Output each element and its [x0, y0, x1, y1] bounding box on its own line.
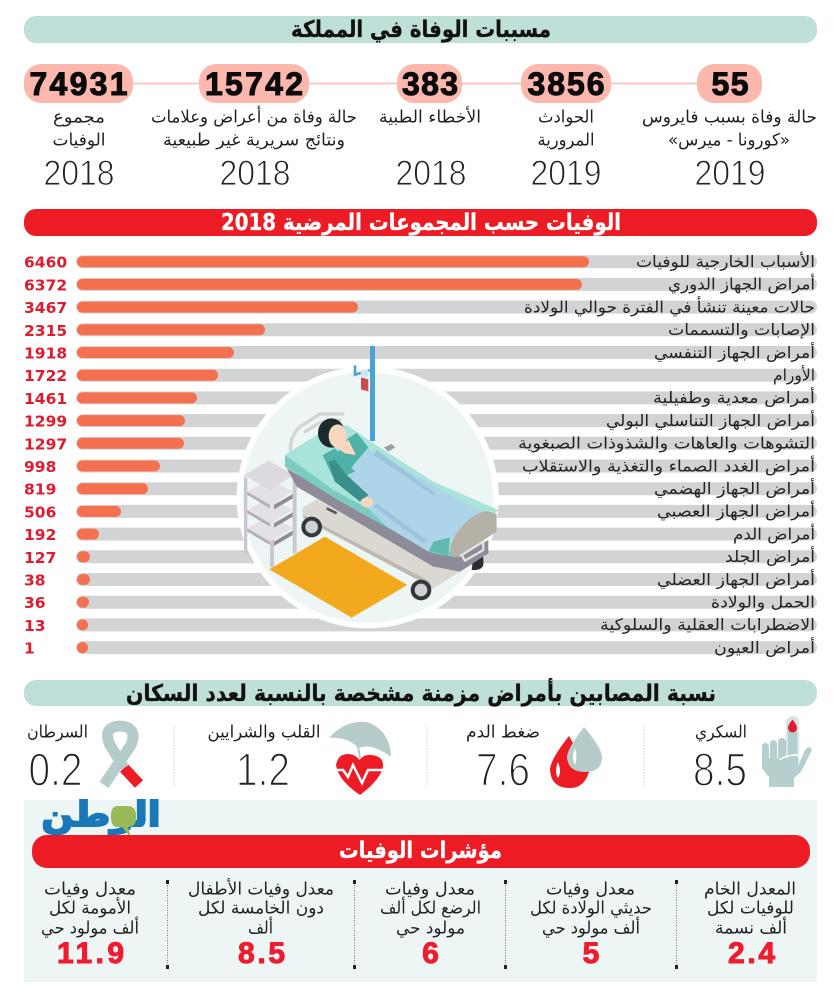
indicator: diabetes	[693, 716, 812, 796]
stat: corona MERS 55	[642, 64, 817, 193]
bar chart: deaths by disease group: الأسباب الخارجية للوفيات	[636, 251, 815, 272]
indicator: heart and arteries: القلب والشرايين	[208, 722, 320, 742]
headrail	[291, 414, 343, 452]
bar chart: deaths by disease group: 506	[24, 503, 56, 521]
bar chart: deaths by disease group: 13	[24, 617, 46, 635]
bar chart: deaths by disease group: 6372	[24, 276, 67, 294]
stat: total deaths 74931: 74931	[30, 66, 128, 102]
bar chart: deaths by disease group: أمراض الجلد	[725, 546, 815, 567]
indicator: blood pressure: 7.6	[476, 744, 530, 796]
icon: hand with blood drop	[762, 716, 812, 787]
bar chart: deaths by disease group: 36	[24, 594, 46, 612]
indicator: crude death rate: 2.4	[728, 937, 775, 970]
bar chart: deaths by disease group: 1918	[24, 344, 67, 362]
bar chart: deaths by disease group: أمراض العيون	[714, 637, 815, 658]
stat: medical errors 383: الأخطاء الطبية	[379, 106, 481, 128]
indicator: infant mortality: الرضع لكل ألف	[380, 896, 481, 918]
mattress	[285, 425, 498, 557]
bar chart: deaths by disease group: أمراض الغدد الصماء والتغذية والاستقلاب	[522, 455, 815, 476]
stat: total deaths 74931: مجموع	[53, 108, 105, 128]
indicator: crude death rate: للوفيات لكل	[707, 898, 794, 918]
indicator: blood pressure: ضغط الدم	[466, 722, 540, 742]
bar chart: deaths by disease group: الأورام	[773, 364, 815, 386]
indicator: under five mortality	[188, 878, 334, 970]
indicator: cancer	[27, 722, 139, 796]
heading: deaths by disease groups 2018	[24, 209, 817, 236]
indicator: diabetes: 8.5	[693, 744, 747, 796]
indicator: neonatal mortality	[530, 880, 652, 970]
indicator: neonatal mortality: معدل وفيات	[546, 880, 635, 900]
patient	[318, 418, 373, 507]
indicator: maternal mortality: ألف مولود حي	[41, 916, 139, 938]
stat: road accidents 3856: 2019	[530, 154, 602, 193]
indicator: cancer: السرطان	[27, 722, 88, 742]
stat: medical errors 383: 2018	[396, 154, 466, 193]
bar chart: deaths by disease group: 6460	[24, 254, 67, 272]
heading: mortality indicators	[32, 835, 810, 868]
rug	[269, 537, 407, 618]
indicator: blood pressure	[466, 722, 602, 796]
bed frame	[287, 468, 488, 572]
stat: corona MERS 55: حالة وفاة بسبب فايروس	[642, 108, 817, 128]
indicator: neonatal mortality: حديثي الولادة لكل	[530, 898, 652, 918]
bar chart: deaths by disease group: أمراض الجهاز العضلي	[657, 569, 815, 590]
heading: mortality indicators: مؤشرات الوفيات	[339, 838, 502, 864]
heading: deaths by disease groups 2018: الوفيات حسب المجموعات المرضية 2018	[221, 210, 621, 236]
stat: corona MERS 55: 55	[712, 66, 748, 102]
bar chart: deaths by disease group: 1297	[24, 435, 67, 453]
stat: medical errors 383: 383	[402, 66, 458, 102]
bar chart: deaths by disease group: الحمل والولادة	[711, 592, 815, 612]
stat: total deaths 74931: الوفيات	[52, 130, 106, 150]
bed base and wheels	[301, 499, 483, 600]
heading: causes of death in the kingdom	[24, 16, 817, 43]
bar chart: deaths by disease group: أمراض معدية وطفيلية	[653, 387, 815, 408]
indicator: heart and arteries: 1.2	[236, 744, 290, 796]
bar chart: deaths by disease group: الاضطرابات العقلية والسلوكية	[600, 615, 815, 635]
indicator: under five mortality: معدل وفيات الأطفال	[188, 878, 334, 900]
indicator: neonatal mortality: 5	[583, 937, 599, 970]
illustration: patient on hospital bed	[237, 346, 499, 628]
stat: abnormal symptoms 15742	[151, 64, 357, 193]
indicator: crude death rate: المعدل الخام	[704, 880, 796, 900]
indicator: under five mortality: ألف	[248, 916, 273, 938]
indicator: crude death rate: ألف نسمة	[715, 916, 787, 938]
bar chart: deaths by disease group	[24, 251, 817, 658]
bar chart: deaths by disease group: 127	[24, 549, 56, 567]
indicator: neonatal mortality: ألف مولود حي	[542, 916, 640, 938]
indicator: crude death rate	[704, 880, 796, 970]
logo: Al Watan: الوطن	[42, 795, 160, 835]
heading: causes of death in the kingdom: مسببات الوفاة في المملكة	[291, 17, 551, 43]
icon: awareness ribbon	[104, 726, 139, 785]
IV pole	[355, 346, 375, 441]
panel: death cause totals	[24, 64, 817, 193]
stat: road accidents 3856: الحوادث	[538, 108, 594, 128]
indicator: cancer: 0.2	[28, 744, 82, 796]
indicator: maternal mortality: الأمومة لكل	[49, 898, 131, 918]
indicator: maternal mortality: معدل وفيات	[44, 880, 136, 900]
bar chart: deaths by disease group: أمراض الجهاز العصبي	[657, 501, 815, 522]
stat: abnormal symptoms 15742: ونتائج سريرية غير طبيعية	[163, 130, 345, 150]
stat: corona MERS 55: «كورونا - ميرس»	[668, 130, 790, 150]
bar chart: deaths by disease group: 1299	[24, 413, 67, 431]
stat: abnormal symptoms 15742: 15742	[205, 66, 303, 102]
bar chart: deaths by disease group: 2315	[24, 322, 67, 340]
bar chart: deaths by disease group: 819	[24, 481, 56, 499]
stat: total deaths 74931	[24, 64, 133, 193]
bar chart: deaths by disease group: 3467	[24, 299, 67, 317]
bar chart: deaths by disease group: أمراض الجهاز الدوري	[668, 274, 815, 295]
bar chart: deaths by disease group: 192	[24, 526, 56, 544]
bar chart: deaths by disease group: 1722	[24, 367, 67, 385]
indicator: under five mortality: 8.5	[238, 937, 285, 970]
icon: blood drops	[550, 727, 602, 788]
bar chart: deaths by disease group: 38	[24, 572, 46, 590]
bar chart: deaths by disease group: أمراض الجهاز التناسلي البولي	[606, 410, 815, 431]
indicator: maternal mortality: 11.9	[57, 937, 124, 970]
stat: road accidents 3856: 3856	[528, 66, 604, 102]
bar chart: deaths by disease group: أمراض الدم	[733, 523, 815, 544]
bar chart: deaths by disease group: 1461	[24, 390, 67, 408]
indicator: infant mortality: مولود حي	[396, 918, 465, 938]
icon: umbrella over heart	[329, 722, 391, 795]
bar chart: deaths by disease group: الإصابات والتسممات	[668, 320, 815, 340]
indicator: infant mortality	[380, 880, 481, 970]
bar chart: deaths by disease group: 998	[24, 458, 56, 476]
stat: abnormal symptoms 15742: 2018	[220, 154, 290, 193]
indicator: infant mortality: 6	[422, 937, 439, 970]
panel: mortality indicators	[24, 795, 817, 982]
stat: road accidents 3856	[521, 64, 611, 193]
bar chart: deaths by disease group: التشوهات والعاهات والشذوذات الصبغوية	[518, 434, 815, 454]
bar chart: deaths by disease group: حالات معينة تنشأ في الفترة حوالي الولادة	[524, 295, 815, 317]
indicator: maternal mortality	[41, 880, 139, 970]
panel: chronic disease indicators	[27, 716, 812, 796]
footboard	[450, 511, 497, 557]
heading: chronic disease rates	[24, 677, 817, 707]
bed remote	[384, 444, 395, 452]
heading: chronic disease rates: نسبة المصابين بأمراض مزمنة مشخصة بالنسبة لعدد السكان	[126, 677, 716, 707]
stat: medical errors 383	[379, 64, 481, 193]
indicator: infant mortality: معدل وفيات	[385, 880, 475, 900]
indicator: diabetes: السكري	[695, 722, 747, 742]
blanket	[345, 448, 482, 552]
indicator: heart and arteries	[208, 722, 391, 796]
stat: corona MERS 55: 2019	[694, 154, 766, 193]
indicator: under five mortality: دون الخامسة لكل	[198, 898, 324, 918]
stat: total deaths 74931: 2018	[44, 154, 114, 193]
bar chart: deaths by disease group: أمراض الجهاز التنفسي	[654, 342, 815, 363]
stat: road accidents 3856: المرورية	[538, 130, 594, 150]
bar chart: deaths by disease group: 1	[24, 640, 35, 658]
stat: abnormal symptoms 15742: حالة وفاة من أعراض وعلامات	[151, 106, 357, 128]
bedside cart	[244, 461, 297, 567]
bar chart: deaths by disease group: أمراض الجهاز الهضمي	[654, 478, 815, 499]
